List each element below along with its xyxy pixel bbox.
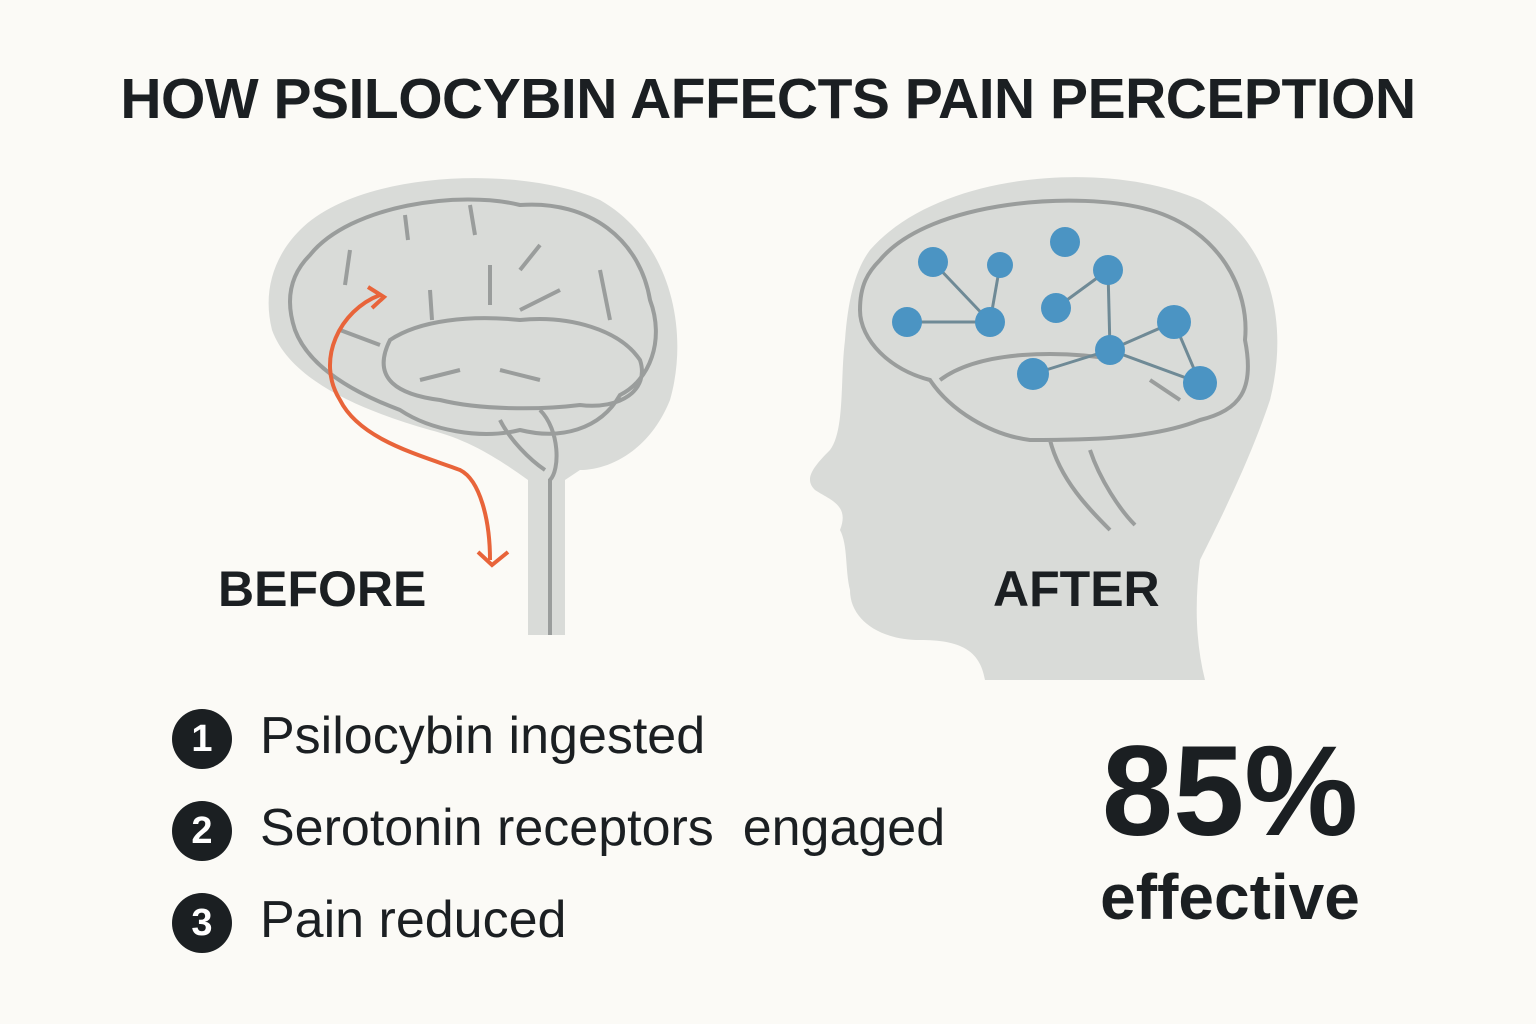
stat: 85% effective: 85%: [1102, 720, 1358, 863]
panel: before brain: [269, 178, 677, 635]
stat: 85% effective: effective: [1100, 861, 1360, 933]
step 2: Serotonin receptors engaged: [260, 799, 945, 857]
label: before: BEFORE: [218, 561, 426, 617]
step 2: 2: [191, 810, 213, 852]
step 1: Psilocybin ingested: [260, 707, 705, 765]
panel: after head: [810, 177, 1277, 680]
step 3: 3: [191, 902, 213, 944]
stat: 85% effective: [1100, 720, 1360, 933]
label: after: AFTER: [993, 561, 1160, 617]
title: HOW PSILOCYBIN AFFECTS PAIN PERCEPTION: [120, 67, 1416, 131]
step 3: Pain reduced: [260, 891, 566, 949]
step 1: 1: [191, 718, 213, 760]
steps list: [172, 707, 945, 953]
